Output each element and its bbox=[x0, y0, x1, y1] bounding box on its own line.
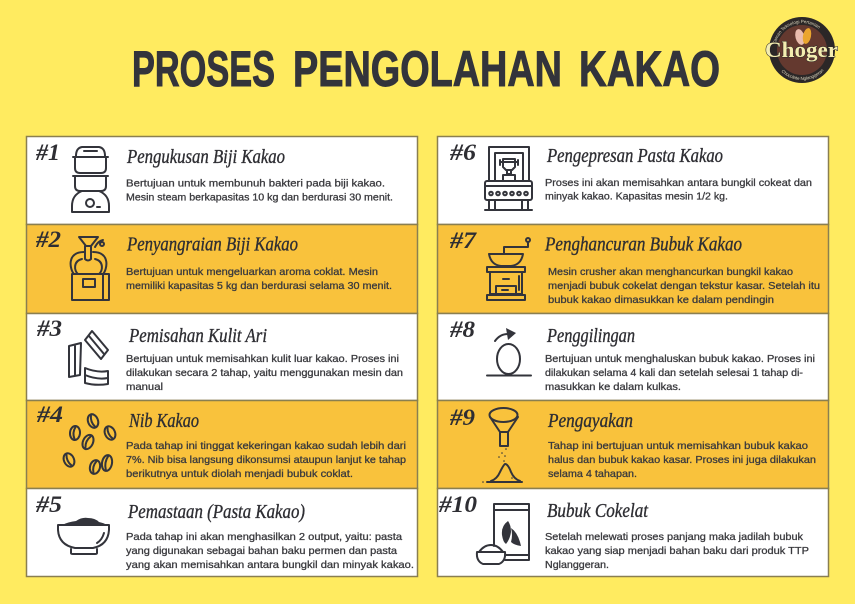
step number 3: #3 bbox=[36, 316, 62, 341]
title bbox=[132, 41, 720, 97]
logo: Choger bbox=[765, 17, 838, 83]
step description: menjadi bubuk cokelat dengan tekstur kasar. Setelah itu bbox=[548, 280, 820, 292]
step number 6: #6 bbox=[449, 140, 477, 165]
step description: Proses ini akan memisahkan antara bungkil cokeat dan bbox=[545, 177, 812, 189]
logo: Choger: Choger bbox=[765, 37, 838, 62]
step title: Pemastaan (Pasta Kakao) bbox=[127, 501, 305, 523]
step description bbox=[548, 440, 816, 480]
icon: press machine bbox=[485, 147, 532, 210]
step description bbox=[545, 531, 809, 571]
title: PROSES bbox=[132, 41, 275, 97]
step description: dilakukan selama 4 kali dan setelah selesai 1 tahap di- bbox=[545, 367, 803, 379]
panel: step 4 bbox=[26, 400, 418, 488]
step number 9: #9 bbox=[449, 405, 476, 430]
step number 7: #7 bbox=[449, 228, 478, 253]
step description: halus dan bubuk kakao kasar. Proses ini juga dilakukan bbox=[548, 454, 816, 466]
step description bbox=[548, 266, 820, 306]
step title: Penyangraian Biji Kakao bbox=[126, 234, 298, 256]
step title: Penggilingan bbox=[546, 325, 635, 347]
step description: Tahap ini bertujuan untuk memisahkan bubuk kakao bbox=[548, 440, 808, 452]
panel: step 8 bbox=[438, 314, 828, 400]
step description: Bertujuan untuk membunuh bakteri pada biji kakao. bbox=[126, 178, 385, 190]
step description: Pada tahap ini tinggat kekeringan kakao sudah lebih dari bbox=[126, 440, 406, 452]
step description: yang akan memisahkan antara bungkil dan minyak kakao. bbox=[126, 559, 414, 571]
icon: cocoa nibs bbox=[62, 413, 117, 475]
icon: sieve funnel and powder bbox=[482, 408, 522, 483]
step description: berikutnya untuk diolah menjadi bubuk coklat. bbox=[126, 468, 353, 480]
panel: step 2 bbox=[26, 224, 418, 314]
panel: step 7 bbox=[438, 224, 828, 314]
step description: 7%. Nib bisa langsung dikonsumsi ataupun lanjut ke tahap bbox=[126, 454, 406, 466]
step number 4: #4 bbox=[36, 402, 63, 427]
step number 5: #5 bbox=[35, 492, 62, 517]
title: KAKAO bbox=[579, 41, 720, 97]
step title: Pengukusan Biji Kakao bbox=[126, 146, 285, 168]
step title: Pemisahan Kulit Ari bbox=[128, 325, 267, 347]
icon: hand grinder bbox=[487, 238, 530, 300]
step description bbox=[126, 353, 403, 393]
step description: manual bbox=[126, 381, 163, 393]
step title: Pengayakan bbox=[547, 410, 633, 432]
panel: step 10 bbox=[438, 488, 828, 576]
logo: Choger: Taman Teknologi Pertanian bbox=[773, 20, 820, 42]
step description: bubuk kakao dimasukkan ke dalam pendingin bbox=[548, 294, 774, 306]
icon: press machine dials bbox=[489, 192, 528, 195]
step description: Setelah melewati proses panjang maka jadilah bubuk bbox=[545, 531, 804, 543]
step description: memiliki kapasitas 5 kg dan berdurasi selama 30 menit. bbox=[126, 280, 392, 292]
icon: rolling ball with arrow bbox=[487, 328, 531, 376]
step description bbox=[126, 266, 392, 292]
icon: steamer bbox=[72, 147, 109, 212]
step title: Pengepresan Pasta Kakao bbox=[546, 145, 723, 167]
panel: step 6 bbox=[438, 136, 828, 224]
step description bbox=[545, 177, 812, 202]
step number 8: #8 bbox=[449, 317, 476, 342]
step description bbox=[545, 353, 815, 393]
step description bbox=[126, 531, 414, 571]
step number 10: #10 bbox=[438, 492, 478, 517]
step title: Nib Kakao bbox=[128, 410, 199, 432]
panel: step 3 bbox=[26, 314, 418, 400]
step description: yang digunakan sebagai bahan baku permen dan pasta bbox=[126, 545, 397, 557]
logo: Choger: Chocolate Nglanggeran bbox=[782, 69, 824, 81]
icon: cocoa powder bag and bowl bbox=[477, 504, 529, 564]
step number 2: #2 bbox=[35, 227, 61, 252]
step description: minyak kakao. Kapasitas mesin 1/2 kg. bbox=[545, 190, 728, 202]
step description: selama 4 tahapan. bbox=[548, 468, 637, 480]
panel: step 5 bbox=[26, 488, 418, 576]
step description: Nglanggeran. bbox=[545, 559, 609, 571]
icon: cocoa skin strips bbox=[69, 331, 108, 385]
title: PENGOLAHAN bbox=[293, 41, 562, 97]
step number 1: #1 bbox=[35, 140, 60, 165]
icon: roaster bbox=[71, 237, 109, 300]
step description: Mesin steam berkapasitas 10 kg dan berdurasi 30 menit. bbox=[126, 192, 393, 204]
step title: Penghancuran Bubuk Kakao bbox=[544, 234, 742, 256]
step description: Bertujuan untuk mengeluarkan aroma coklat. Mesin bbox=[126, 266, 378, 278]
step description: Bertujuan untuk memisahkan kulit luar kakao. Proses ini bbox=[126, 353, 399, 365]
step description bbox=[126, 440, 406, 480]
panel: step 1 bbox=[26, 136, 418, 224]
step description bbox=[126, 178, 393, 204]
step title: Bubuk Cokelat bbox=[547, 500, 648, 522]
icon: bowl of cocoa paste bbox=[58, 518, 109, 554]
step description: kakao yang siap menjadi bahan baku dari produk TTP bbox=[545, 545, 809, 557]
step description: Pada tahap ini akan menghasilkan 2 output, yaitu: pasta bbox=[126, 531, 402, 543]
step description: dilakukan secara 2 tahap, yaitu menggunakan mesin dan bbox=[126, 367, 403, 379]
panel: step 9 bbox=[438, 400, 828, 488]
step description: Bertujuan untuk menghaluskan bubuk kakao. Proses ini bbox=[545, 353, 815, 365]
step description: Mesin crusher akan menghancurkan bungkil kakao bbox=[548, 266, 793, 278]
step description: masukkan ke dalam kulkas. bbox=[545, 381, 681, 393]
